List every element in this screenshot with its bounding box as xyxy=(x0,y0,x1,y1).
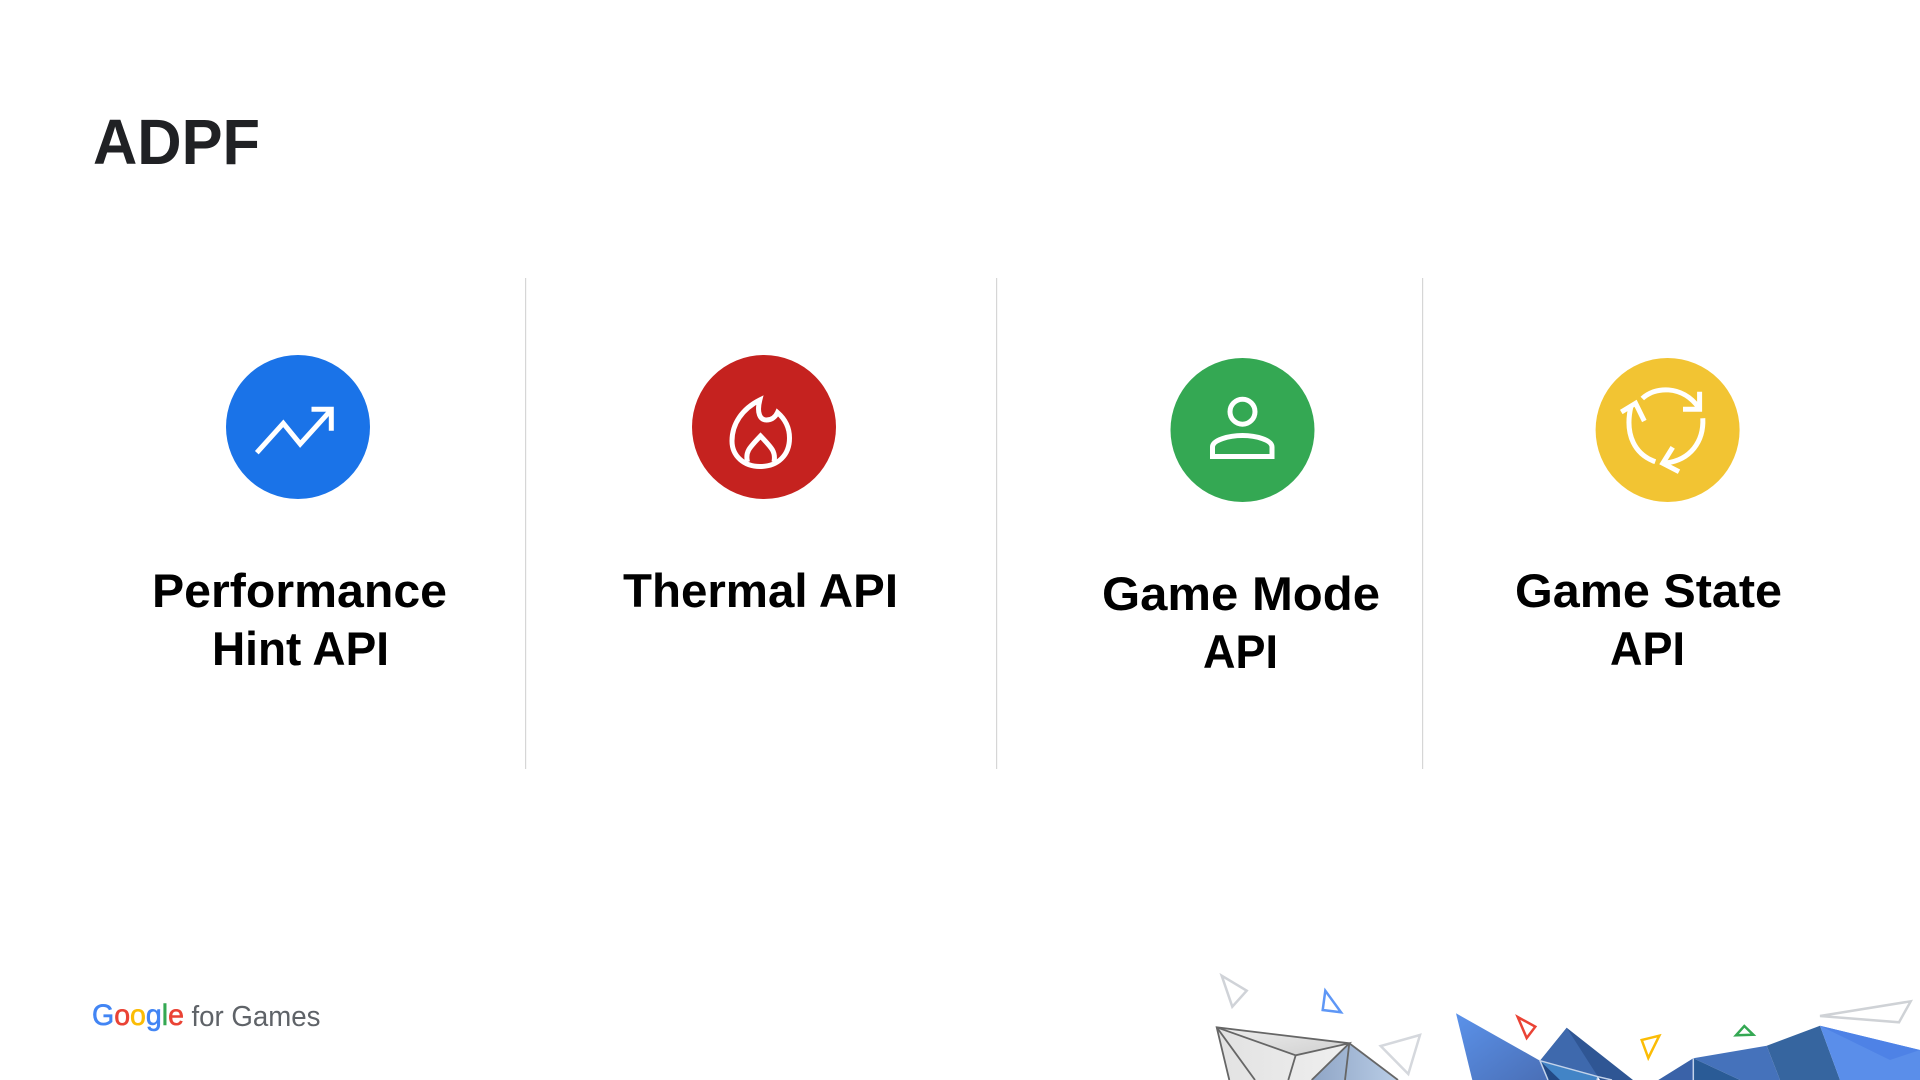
icon: refresh cycle xyxy=(1596,358,1740,502)
heading: Performance Hint API: Hint API xyxy=(212,622,389,675)
panel: Game State API xyxy=(1515,358,1782,675)
decoration: blue polygon mountains xyxy=(1456,1013,1920,1080)
heading: Game Mode API: API xyxy=(1203,625,1278,678)
heading: Game Mode API: Game Mode xyxy=(1102,567,1380,620)
decoration: outline triangles xyxy=(1222,976,1911,1074)
heading: Performance Hint API xyxy=(152,564,447,675)
heading: Game State API xyxy=(1515,564,1782,675)
heading: Thermal API: Thermal API xyxy=(623,564,898,617)
panel: Game Mode API xyxy=(1102,358,1380,678)
title: ADPF xyxy=(93,106,260,178)
heading: Game State API: Game State xyxy=(1515,564,1782,617)
heading: Game State API: API xyxy=(1610,622,1685,675)
icon: trending up chart xyxy=(226,355,370,499)
logo: Google for Games: for Games xyxy=(192,1001,320,1033)
logo: Google for Games xyxy=(92,999,320,1033)
decoration: grey polyhedron xyxy=(1217,1027,1398,1080)
logo: Google for Games: Google xyxy=(92,999,184,1032)
heading: Performance Hint API: Performance xyxy=(152,564,447,617)
panel: Performance Hint API xyxy=(152,355,447,675)
panel: Thermal API xyxy=(623,355,898,617)
heading: Game Mode API xyxy=(1102,567,1380,678)
icon: person xyxy=(1170,358,1314,502)
icon: flame xyxy=(692,355,836,499)
